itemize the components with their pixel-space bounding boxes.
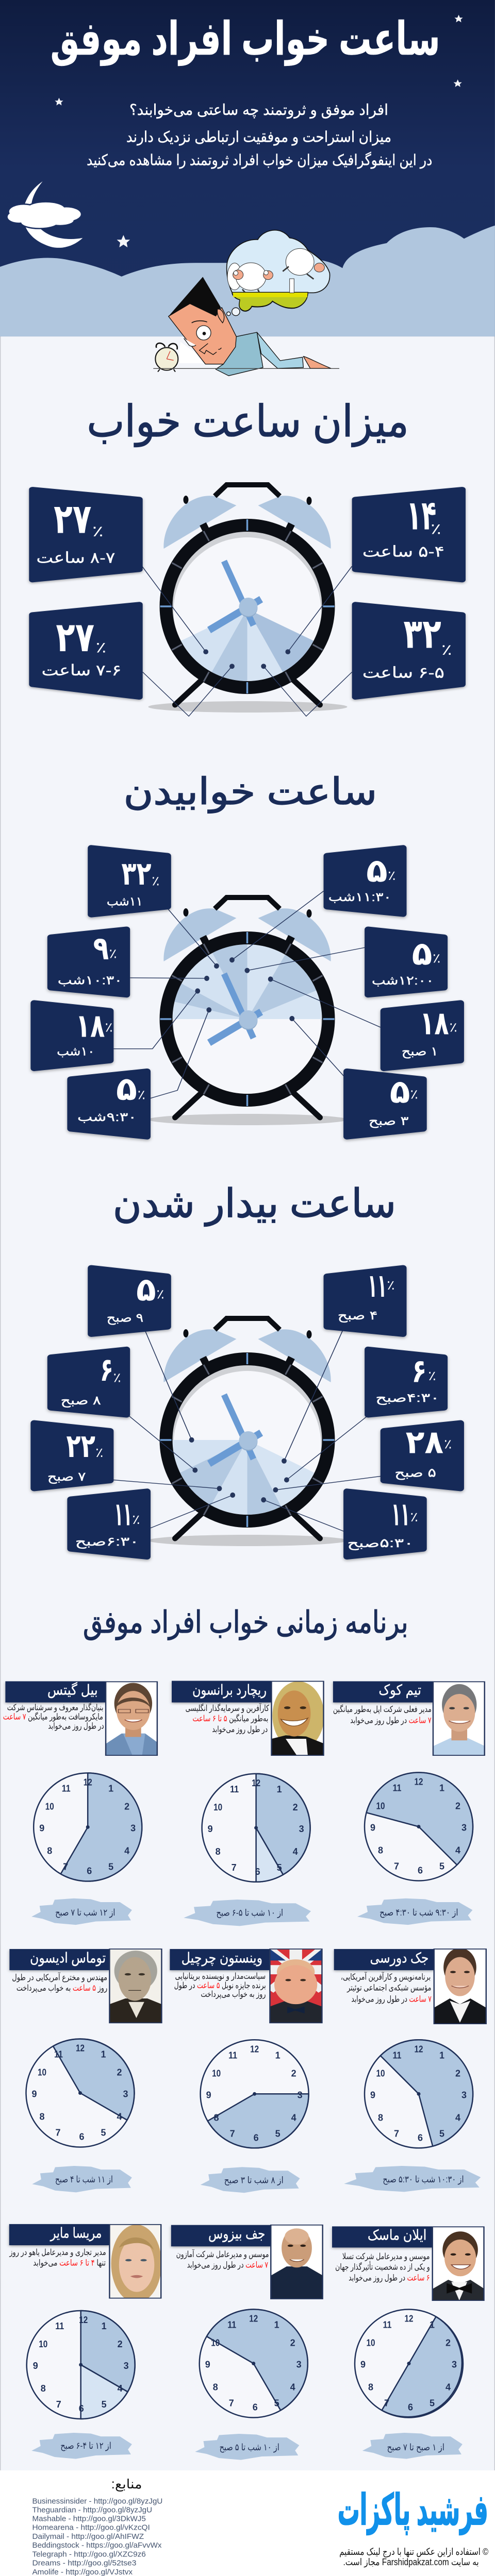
card: 5% 9:30pm: ۹:۳۰شب xyxy=(77,1111,137,1124)
sheep xyxy=(227,248,324,293)
panel: night sky header xyxy=(0,0,495,336)
person: Winston Churchill: سیاست‌مدار و نویسنده بریتانیایی xyxy=(175,1972,266,1981)
card: 32% 11pm: ۳۲ xyxy=(121,855,152,891)
card: 14% 4-5 hours xyxy=(355,489,462,580)
person: Winston Churchill: برنده جایزه نوبل ۵ ساعت در طول xyxy=(174,1981,266,1990)
clock: Richard Branson: 2 xyxy=(293,1802,298,1812)
clock: Marissa Mayer: 10 xyxy=(39,2339,47,2349)
card: 14% 4-5 hours: ۱۴ xyxy=(406,493,436,538)
time labels row 2: از ۸ شب تا ۳ صبح xyxy=(224,2175,284,2185)
clock: Elon Musk: 4 xyxy=(446,2382,451,2393)
clock: Jack Dorsey: 4 xyxy=(455,2112,460,2123)
card: 27% 7-8 hours xyxy=(32,489,139,580)
card: 32% 5-6 hours: ۶-۵ ساعت xyxy=(362,665,444,681)
clock: Marissa Mayer: 2 xyxy=(118,2339,123,2349)
clock: Winston Churchill: 10 xyxy=(212,2068,221,2078)
card: 9% 10:30pm: ٪ xyxy=(109,946,117,961)
clock: Jeff Bezos: 3 xyxy=(296,2360,302,2370)
card: 5% 9am: ٪ xyxy=(156,1286,164,1301)
person: Richard Branson: کارآفرین و سرمایه‌گذار انگلیسی xyxy=(186,1703,269,1713)
card: 5% 12:00am: ٪ xyxy=(433,951,440,965)
clock: Richard Branson: 11 xyxy=(230,1784,239,1794)
clock: Richard Branson: 5 xyxy=(277,1862,282,1873)
card: 5% 9:30pm xyxy=(71,1071,147,1137)
card: 11% 6:30am xyxy=(71,1492,147,1556)
clock: Elon Musk: 10 xyxy=(366,2338,375,2348)
floor line xyxy=(153,368,339,369)
clock: Jeff Bezos: 6 xyxy=(253,2402,258,2412)
panel: footer with labels, sources, logo xyxy=(31,2433,488,2576)
card: 18% 1am xyxy=(384,1003,460,1068)
card: 9% 10:30pm xyxy=(51,929,126,995)
card: 5% 3am: ۳ صبح xyxy=(369,1115,409,1128)
person: Jeff Bezos: ۷ ساعت در طول روز می‌خوابد xyxy=(187,2261,268,2270)
clock: Elon Musk: 1 xyxy=(430,2319,435,2330)
callouts: wake time xyxy=(34,1267,460,1556)
card: 6% 8am: ٪ xyxy=(113,1370,121,1385)
clock: Tim Cook: 9 xyxy=(370,1823,375,1833)
clock: Bill Gates: 7 xyxy=(63,1861,68,1872)
card: 11% 5:30am xyxy=(347,1492,423,1556)
card: 9% 10:30pm: ۹ xyxy=(93,930,109,967)
clock: Tim Cook: 1 xyxy=(439,1783,444,1793)
illustration: man dreaming of sheep xyxy=(153,230,339,376)
wedges xyxy=(181,613,314,681)
chart: alarm clock wake time xyxy=(144,1318,348,1546)
person: Jack Dorsey: جک دورسی xyxy=(370,1950,428,1966)
clock: Thomas Edison: 4 xyxy=(117,2111,122,2122)
clock: Thomas Edison: 12 xyxy=(76,2043,85,2054)
card: 18% 10pm xyxy=(34,1003,113,1068)
clock: Jeff Bezos xyxy=(200,2309,308,2417)
card: 27% 7-8 hours: ٪ xyxy=(92,523,104,540)
intro text: میزان استراحت و موفقیت ارتباطی نزدیک دارند xyxy=(126,128,391,146)
clock: Bill Gates: 2 xyxy=(124,1801,129,1811)
clock: Jeff Bezos: 4 xyxy=(290,2382,295,2393)
clock: Thomas Edison: 3 xyxy=(123,2089,128,2099)
sources list: Theguardian - http://goo.gl/8yzJgU xyxy=(32,2506,152,2514)
clock: Tim Cook: 2 xyxy=(455,1801,460,1811)
card: 18% 1am: ۱ صبح xyxy=(402,1045,438,1059)
card: 22% 7am xyxy=(34,1423,110,1488)
sources list: Dailymail - http://goo.gl/AhIFWZ xyxy=(32,2533,144,2541)
clock: Tim Cook: 11 xyxy=(393,1783,401,1793)
chart: alarm clock bedtime xyxy=(144,897,351,1125)
clock: Winston Churchill: 2 xyxy=(291,2068,296,2078)
person: Jeff Bezos: جف بیزوس xyxy=(208,2226,265,2242)
person: Bill Gates: مایکروسافت به‌طور میانگین ۷ ساعت xyxy=(3,1711,103,1722)
clock: Jeff Bezos: 12 xyxy=(249,2313,258,2324)
card: 11% 5:30am: ٪ xyxy=(410,1510,418,1524)
card: 11% 4am: ۱۱ xyxy=(368,1267,387,1303)
sources list xyxy=(32,2497,162,2576)
card: 6% 8am xyxy=(51,1349,126,1415)
clock: Winston Churchill: 8 xyxy=(214,2112,219,2123)
card: 5% 11:30pm: ۵ xyxy=(366,853,388,889)
wedges xyxy=(172,1440,315,1515)
clock: Jeff Bezos: 9 xyxy=(205,2360,210,2370)
clock: Bill Gates: 9 xyxy=(39,1823,44,1833)
card: 6% 4:30am: ٪ xyxy=(428,1368,436,1383)
card: 18% 1am: ۱۸ xyxy=(420,1005,449,1041)
clock: Marissa Mayer xyxy=(27,2311,135,2419)
clock: Thomas Edison: 9 xyxy=(31,2089,37,2099)
card: 5% 12:00am xyxy=(368,929,444,995)
person: Richard Branson: ریچارد برانسون xyxy=(192,1683,267,1698)
clock: Jack Dorsey: 12 xyxy=(415,2044,423,2054)
clock: Winston Churchill: 7 xyxy=(230,2128,235,2139)
clock: Elon Musk: 9 xyxy=(360,2360,366,2370)
clock: Jack Dorsey: 3 xyxy=(461,2090,467,2100)
clock: Winston Churchill xyxy=(201,2040,309,2148)
callouts: sleep hours xyxy=(32,489,462,716)
clock: Bill Gates: 8 xyxy=(47,1845,52,1856)
clock: Bill Gates: 3 xyxy=(130,1823,136,1833)
wedges xyxy=(172,944,322,1019)
clock: Marissa Mayer: 9 xyxy=(33,2361,38,2371)
time labels row 3 xyxy=(31,2433,463,2460)
time labels row 2: از ۱۱ شب تا ۴ صبح xyxy=(55,2174,113,2184)
person: Richard Branson: به‌طور میانگین ۵ تا ۶ ساعت xyxy=(192,1714,268,1723)
hills xyxy=(0,226,495,336)
time labels row 3: از ۱ صبح تا ۷ صبح xyxy=(387,2442,444,2453)
person: Thomas Edison: روز ۵ ساعت به خواب می‌پرداخت xyxy=(16,1984,107,1993)
card: 14% 4-5 hours: ۵-۴ ساعت xyxy=(362,544,444,560)
clock: Thomas Edison: 5 xyxy=(101,2128,106,2138)
sources list: Beddingstock - https://goo.gl/aFvvWx xyxy=(32,2541,162,2550)
clock: Winston Churchill: 3 xyxy=(298,2090,303,2100)
person: Bill Gates xyxy=(3,1681,158,1756)
clock: Marissa Mayer: 7 xyxy=(56,2399,61,2410)
clock: Elon Musk: 6 xyxy=(408,2402,413,2412)
card: 18% 10pm: ۱۸ xyxy=(76,1008,105,1044)
card: 6% 4:30am: ۶ xyxy=(412,1353,426,1389)
card: 6% 8am: ۶ xyxy=(100,1351,113,1388)
time labels row 1: از ۱۲ شب تا ۷ صبح xyxy=(55,1907,115,1918)
card: 11% 6:30am: ٪ xyxy=(132,1512,140,1527)
card: 11% 6:30am: ۱۱ xyxy=(114,1496,132,1532)
card: 28% 5am: ۲۸ xyxy=(406,1423,443,1460)
clock: Tim Cook: 7 xyxy=(394,1861,399,1871)
clock: Richard Branson: 7 xyxy=(232,1862,237,1873)
clock: Jeff Bezos: 8 xyxy=(213,2382,218,2393)
card: 11% 5:30am: ۱۱ xyxy=(391,1496,410,1532)
clock: Richard Branson xyxy=(202,1774,310,1882)
person: Thomas Edison xyxy=(9,1949,161,2023)
card: 32% 11pm xyxy=(91,848,168,914)
clock: Elon Musk: 3 xyxy=(452,2360,457,2370)
clock: Jack Dorsey: 9 xyxy=(370,2090,375,2100)
card: 5% 3am xyxy=(347,1072,423,1137)
card: 6% 4:30am: ۴:۳۰صبح xyxy=(375,1392,439,1405)
panel: people row 1 text and photos xyxy=(3,1605,485,1926)
card: 5% 11:30pm: ۱۱:۳۰شب xyxy=(328,891,391,904)
person: Marissa Mayer: تنها ۴ تا ۶ ساعت می‌خوابد xyxy=(33,2258,106,2267)
clock: Elon Musk: 11 xyxy=(383,2319,392,2330)
card: 11% 4am xyxy=(327,1267,403,1334)
clock: Elon Musk xyxy=(355,2309,463,2417)
card: 11% 4am: ۴ صبح xyxy=(338,1309,377,1323)
small alarm clock xyxy=(155,343,178,372)
clock: Thomas Edison: 7 xyxy=(55,2128,61,2138)
clock: Jeff Bezos: 10 xyxy=(211,2338,220,2348)
card: 22% 7am: ۷ صبح xyxy=(47,1470,86,1484)
clock: Jeff Bezos: 11 xyxy=(227,2319,236,2330)
person: Bill Gates: بنیان‌گذار معروف و سرشناس شرکت xyxy=(7,1703,103,1713)
copyright notice xyxy=(339,2547,488,2568)
sources list: Dreams - http://goo.gl/52tse3 xyxy=(32,2559,136,2567)
clock: Winston Churchill: 1 xyxy=(275,2050,280,2060)
clock: Jeff Bezos: 1 xyxy=(274,2319,279,2330)
card: 5% 9am xyxy=(91,1268,168,1334)
clock: Tim Cook: 10 xyxy=(376,1801,385,1811)
callouts: bedtime xyxy=(34,848,460,1137)
card: 9% 10:30pm: ۱۰:۳۰شب xyxy=(58,974,122,987)
card: 27% 7-8 hours: ۸-۷ ساعت xyxy=(36,550,115,566)
clock: Winston Churchill: 5 xyxy=(275,2128,280,2139)
card: 28% 5am xyxy=(384,1423,460,1488)
card: 28% 5am: ٪ xyxy=(444,1436,452,1451)
clock: Bill Gates: 4 xyxy=(124,1845,129,1856)
clock: Winston Churchill: 6 xyxy=(254,2132,259,2143)
person: Marissa Mayer: مریسا مایر xyxy=(50,2225,102,2241)
card: 27% 6-7 hours: ٪ xyxy=(95,639,106,656)
body xyxy=(216,332,331,376)
person: Richard Branson xyxy=(172,1681,324,1755)
clock: Winston Churchill: 12 xyxy=(250,2044,259,2054)
clock: Jeff Bezos: 2 xyxy=(290,2338,295,2348)
clock: Richard Branson: 9 xyxy=(208,1824,213,1834)
heading: bedtime: ساعت خوابیدن xyxy=(124,771,377,814)
clock: Jack Dorsey xyxy=(365,2040,473,2148)
time labels row 1: از ۹:۳۰ شب تا ۴:۳۰ صبح xyxy=(380,1907,458,1918)
time labels row 3: از ۱۰ شب تا ۵ صبح xyxy=(219,2442,279,2453)
clock: Jack Dorsey: 10 xyxy=(376,2068,385,2078)
person: Marissa Mayer xyxy=(9,2224,161,2303)
card: 27% 6-7 hours: ۷-۶ ساعت xyxy=(42,662,121,679)
person: Tim Cook: ۷ ساعت در طول روز می‌خوابد xyxy=(350,1716,432,1725)
clock: Marissa Mayer: 5 xyxy=(102,2399,107,2410)
clock: Elon Musk: 12 xyxy=(404,2313,414,2324)
card: 5% 3am: ٪ xyxy=(410,1087,418,1101)
card: 5% 9:30pm: ۵ xyxy=(116,1071,137,1107)
clock: Elon Musk: 2 xyxy=(446,2338,451,2348)
time labels row 3: از ۱۲ تا ۴-۶ صبح xyxy=(60,2441,111,2451)
clock: Elon Musk: 5 xyxy=(430,2398,435,2408)
thought bubble xyxy=(227,230,330,316)
panel: people rows 2 and 3 text and photos xyxy=(9,1948,486,2303)
heading: wake time: ساعت بیدار شدن xyxy=(113,1181,396,1227)
sources list: Mashable - http://goo.gl/3DkWJ5 xyxy=(32,2515,146,2523)
clock: Jeff Bezos: 7 xyxy=(229,2398,234,2408)
clock: Jack Dorsey: 7 xyxy=(394,2128,399,2139)
clock: Thomas Edison: 1 xyxy=(101,2049,106,2060)
card: 5% 11:30pm xyxy=(327,848,403,914)
clock: Richard Branson: 6 xyxy=(255,1867,260,1877)
card: 6% 4:30am xyxy=(368,1349,444,1415)
icon: crescent moon xyxy=(23,181,82,248)
card: 32% 11pm: ۱۱شب xyxy=(107,895,143,908)
card: 14% 4-5 hours: ٪ xyxy=(431,521,441,537)
card: 5% 12:00am: ۱۲:۰۰شب xyxy=(372,974,434,988)
card: 18% 10pm: ۱۰شب xyxy=(57,1045,95,1058)
clock: Richard Branson: 10 xyxy=(213,1802,222,1812)
icon: cloud xyxy=(7,202,81,228)
clock: Bill Gates: 11 xyxy=(62,1783,71,1793)
card: 27% 7-8 hours: ۲۷ xyxy=(54,497,92,542)
card: 18% 10pm: ٪ xyxy=(105,1020,113,1035)
clock: Thomas Edison: 10 xyxy=(38,2067,46,2077)
clock: Tim Cook: 5 xyxy=(439,1861,444,1871)
card: 11% 6:30am: ۶:۳۰صبح xyxy=(75,1535,139,1549)
clock: Tim Cook: 6 xyxy=(418,1865,423,1875)
sources list: Telegraph - http://goo.gl/XZC9z6 xyxy=(32,2550,146,2558)
card: 32% 5-6 hours: ۳۲ xyxy=(403,612,441,657)
card: 5% 9am: ۹ صبح xyxy=(107,1311,143,1325)
clock: Thomas Edison: 6 xyxy=(79,2132,85,2142)
clock: Marissa Mayer: 8 xyxy=(41,2383,46,2394)
clock: Winston Churchill: 4 xyxy=(291,2112,296,2123)
clock: Richard Branson: 12 xyxy=(252,1778,260,1788)
clock: Richard Branson: 8 xyxy=(216,1846,221,1857)
clock: Tim Cook: 12 xyxy=(415,1776,423,1787)
person: Winston Churchill: وینستون چرچیل xyxy=(182,1950,262,1966)
time labels row 1: از ۱۰ شب تا ۵-۶ صبح xyxy=(216,1908,283,1918)
card: 11% 5:30am: ۵:۳۰صبح xyxy=(347,1537,414,1550)
pillow xyxy=(178,342,204,363)
clock: Bill Gates: 5 xyxy=(108,1861,113,1872)
person: Tim Cook: تیم کوک xyxy=(378,1683,421,1698)
card: 5% 11:30pm: ٪ xyxy=(388,868,395,883)
card: 27% 6-7 hours xyxy=(32,604,139,697)
clock: Thomas Edison: 8 xyxy=(39,2111,45,2122)
card: 5% 9:30pm: ٪ xyxy=(138,1087,145,1102)
clock: Thomas Edison: 11 xyxy=(54,2049,63,2060)
time labels row 1 xyxy=(31,1899,472,1926)
person: Thomas Edison: توماس ادیسون xyxy=(30,1950,106,1966)
card: 5% 3am: ۵ xyxy=(390,1073,410,1110)
clock: Jack Dorsey: 5 xyxy=(439,2128,444,2139)
person: Jeff Bezos: موسس و مدیرعامل شرکت آمازون xyxy=(176,2249,269,2259)
person: Jack Dorsey: مؤسس شبکه‌ی اجتماعی توئیتر xyxy=(346,1983,432,1993)
clock: Winston Churchill: 11 xyxy=(228,2050,237,2060)
card: 11% 4am: ٪ xyxy=(387,1278,395,1292)
time labels row 2: از ۱۰:۳۰ شب تا ۵:۳۰ صبح xyxy=(383,2174,464,2184)
clock: Elon Musk: 8 xyxy=(368,2382,373,2393)
clock: Tim Cook: 4 xyxy=(455,1845,460,1856)
clock: Bill Gates xyxy=(34,1773,142,1881)
clock: Richard Branson: 1 xyxy=(277,1784,282,1794)
person: Tim Cook xyxy=(333,1681,485,1756)
card: 6% 8am: ۸ صبح xyxy=(61,1394,101,1408)
person: Jeff Bezos xyxy=(171,2225,323,2299)
heading: sources: منابع: xyxy=(111,2477,142,2492)
person: Winston Churchill: روز به خواب می‌پرداخت xyxy=(201,1990,266,1999)
card: 32% 11pm: ٪ xyxy=(152,873,159,888)
clock: Richard Branson: 3 xyxy=(299,1824,304,1834)
clock: Bill Gates: 6 xyxy=(87,1866,92,1876)
clock: Jack Dorsey: 8 xyxy=(378,2112,383,2123)
person: Elon Musk: ایلان ماسک xyxy=(368,2228,426,2243)
clock: Jack Dorsey: 6 xyxy=(418,2132,423,2143)
card: 32% 5-6 hours xyxy=(355,604,462,697)
intro text: افراد موفق و ثروتمند چه ساعتی می‌خوابند؟ xyxy=(129,101,388,118)
clock: Jeff Bezos: 5 xyxy=(274,2398,279,2408)
clock: Thomas Edison: 2 xyxy=(117,2067,122,2077)
person: Bill Gates: بیل گیتس xyxy=(47,1682,98,1698)
clock: Richard Branson: 4 xyxy=(293,1846,298,1857)
clock: Marissa Mayer: 1 xyxy=(102,2321,107,2331)
clock: Tim Cook: 8 xyxy=(378,1845,383,1856)
intro text xyxy=(87,101,432,169)
person: Thomas Edison: مهندس و مخترع آمریکایی در طول xyxy=(12,1972,107,1982)
clock: Elon Musk: 7 xyxy=(384,2398,389,2408)
clock: Bill Gates: 1 xyxy=(108,1783,113,1793)
person: Jack Dorsey xyxy=(334,1948,486,2024)
card: 28% 5am: ۵ صبح xyxy=(394,1466,436,1480)
person: Elon Musk xyxy=(332,2226,485,2301)
clock: Jack Dorsey: 1 xyxy=(439,2050,444,2060)
clock: Marissa Mayer: 4 xyxy=(118,2383,123,2394)
clock: Bill Gates: 12 xyxy=(84,1777,92,1787)
clock: Marissa Mayer: 11 xyxy=(55,2321,64,2331)
sources list: Homearena - http://goo.gl/vKzcQI xyxy=(32,2523,150,2532)
sources list: Businessinsider - http://goo.gl/8yzJgU xyxy=(32,2497,162,2505)
clock: Tim Cook: 3 xyxy=(461,1823,467,1833)
card: 32% 5-6 hours: ٪ xyxy=(441,641,452,658)
clock: Winston Churchill: 9 xyxy=(206,2090,211,2100)
card: 18% 1am: ٪ xyxy=(449,1020,457,1035)
card: 27% 6-7 hours: ۲۷ xyxy=(56,615,94,660)
clock: Thomas Edison xyxy=(26,2039,134,2147)
card: 5% 9am: ۵ xyxy=(136,1271,156,1308)
clock: Marissa Mayer: 3 xyxy=(124,2361,129,2371)
card: 5% 12:00am: ۵ xyxy=(412,935,432,972)
clock: Jack Dorsey: 2 xyxy=(455,2068,460,2078)
card: 22% 7am: ۲۲ xyxy=(67,1428,95,1464)
person: Winston Churchill xyxy=(170,1949,322,2023)
time labels row 2 xyxy=(32,2166,481,2193)
clock: Marissa Mayer: 12 xyxy=(79,2315,88,2325)
person: Richard Branson: در طول روز می‌خوابد xyxy=(212,1725,268,1734)
clock: Marissa Mayer: 6 xyxy=(79,2403,84,2414)
person: Marissa Mayer: مدیر تجاری و مدیرعامل یاهو در روز xyxy=(9,2248,106,2257)
card: 22% 7am: ٪ xyxy=(95,1445,103,1460)
person: Elon Musk: موسس و مدیرعامل شرکت تسلا xyxy=(342,2252,430,2261)
head xyxy=(169,277,236,364)
clock: Bill Gates: 10 xyxy=(45,1801,54,1811)
person: Jack Dorsey: ۷ ساعت در طول روز می‌خوابد xyxy=(351,1994,432,2004)
person: Elon Musk: ۶ ساعت در طول روز می‌خوابد xyxy=(349,2273,430,2282)
chart: alarm clock sleep hours xyxy=(148,485,348,713)
icon: stars xyxy=(55,15,463,247)
clock: Jack Dorsey: 11 xyxy=(393,2050,401,2060)
clock: Tim Cook xyxy=(365,1772,473,1880)
person: Bill Gates: در طول روز می‌خوابد xyxy=(48,1721,104,1731)
